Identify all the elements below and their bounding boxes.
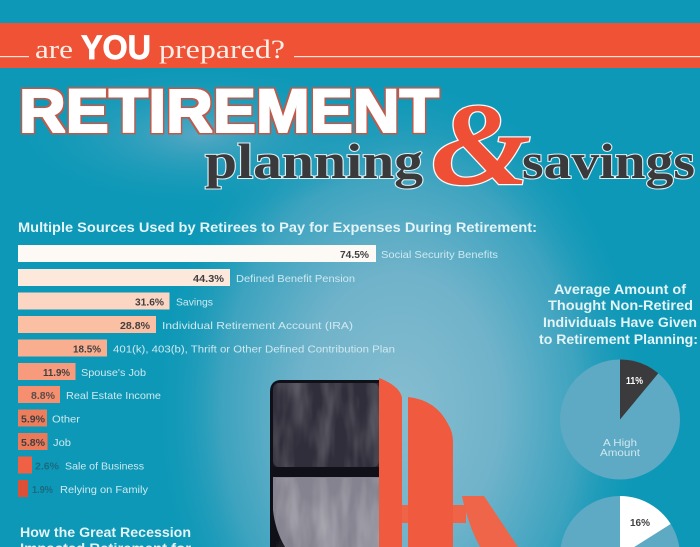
bar: sale of business (18, 456, 144, 474)
bar: defined benefit (18, 269, 355, 286)
chair arm (462, 496, 518, 547)
bar: sale of business: 2.6% (35, 460, 60, 472)
bar: other: Other (52, 414, 81, 426)
background glow upper (0, 68, 700, 238)
bar chart: sources (18, 245, 498, 497)
heading: average amount: Average Amount of (554, 282, 687, 297)
top banner (0, 23, 700, 68)
heading: average amount: Individuals Have Given (543, 315, 697, 330)
bar: social security (18, 245, 498, 262)
bar: social security: 74.5% (340, 249, 370, 261)
bar: job: Job (53, 437, 71, 449)
banner text: YOU (81, 29, 151, 67)
banner text (35, 29, 285, 67)
bar: other: 5.9% (21, 414, 46, 426)
heading: great recession (20, 525, 192, 547)
bar: job: 5.8% (21, 437, 46, 449)
bar: real estate: Real Estate Income (66, 390, 161, 402)
bar: savings (18, 292, 213, 310)
bar: other (18, 410, 81, 426)
bar: savings: 31.6% (135, 296, 165, 308)
bar: spouse's job (18, 363, 146, 380)
slat left (379, 378, 402, 547)
bar: relying on family (18, 480, 149, 497)
cushion (270, 380, 380, 547)
pie: second: 16% (630, 518, 650, 529)
title: savings: savings (522, 133, 695, 189)
title: ampersand: & (431, 79, 531, 210)
bar: real estate: 8.8% (31, 390, 56, 402)
pie: second (560, 496, 680, 547)
pie: a high amount: A High (603, 438, 637, 449)
title: retirement: RETIREMENT (19, 77, 439, 145)
bar: 401k: 18.5% (73, 344, 102, 356)
bar: savings: Savings (176, 296, 213, 308)
bar: 401k: 401(k), 403(b), Thrift or Other Defined Contribution Plan (113, 344, 395, 356)
bar: spouse's job: 11.9% (43, 367, 71, 379)
heading: average amount (539, 282, 698, 347)
bar: ira: Individual Retirement Account (IRA) (162, 320, 353, 332)
bar: defined benefit: 44.3% (193, 273, 225, 285)
bar: ira: 28.8% (120, 320, 151, 332)
heading: multiple sources: Multiple Sources Used by Retirees to Pay for Expenses During Retirement: (18, 220, 537, 235)
chair illustration (270, 378, 518, 547)
bar: spouse's job: Spouse's Job (81, 367, 146, 379)
pie: a high amount: 11% (626, 376, 643, 387)
heading: great recession: How the Great Recession (20, 525, 191, 540)
bar: real estate (18, 386, 161, 403)
title: planning: planning (205, 133, 423, 189)
bar: ira (18, 316, 353, 333)
heading: average amount: Thought Non-Retired (548, 298, 693, 313)
bar: defined benefit: Defined Benefit Pension (236, 273, 355, 285)
bar: 401k (18, 340, 395, 356)
banner text: are (35, 35, 73, 64)
banner text: prepared? (159, 35, 285, 64)
bar: job (18, 433, 71, 450)
cross bars (400, 505, 466, 523)
bar: sale of business: Sale of Business (65, 460, 144, 472)
bar: social security: Social Security Benefits (381, 249, 498, 261)
pie: a high amount: Amount (600, 448, 640, 459)
pie: a high amount (560, 360, 680, 480)
heading: average amount: to Retirement Planning: (539, 332, 698, 347)
slat right (408, 397, 453, 547)
bar: relying on family: Relying on Family (60, 484, 149, 496)
bar: relying on family: 1.9% (32, 484, 54, 496)
